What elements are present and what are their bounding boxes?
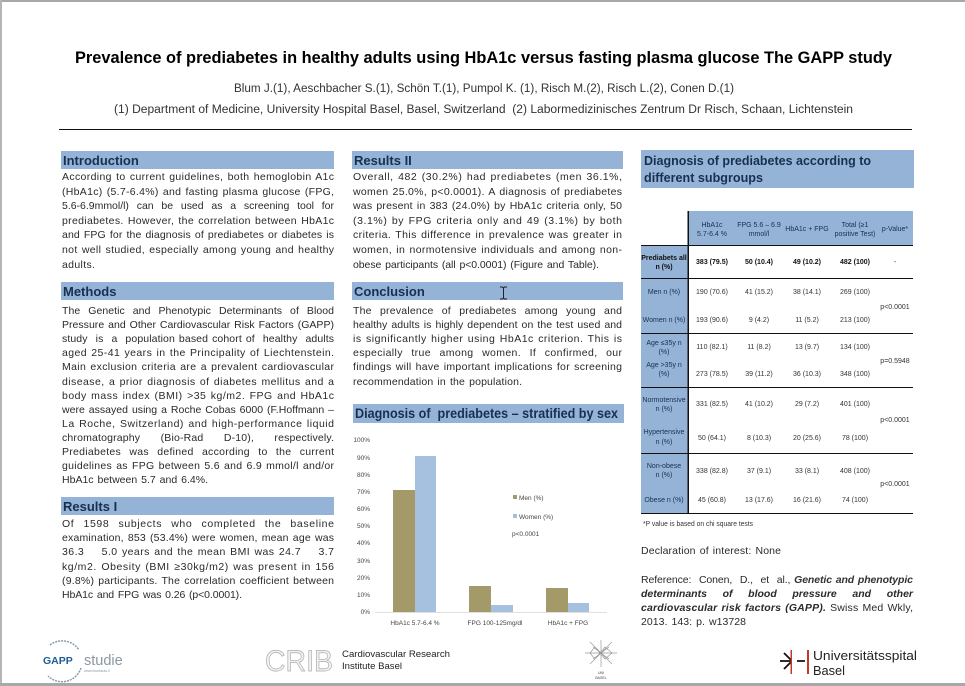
table: prediabetes by subgroup: Hypertensive — [644, 429, 685, 436]
panel: results I: examination, 853 (53.4%) were women, mean age was — [62, 532, 334, 544]
panel: methods: The Genetic and Phenotypic Determinants of Blood — [62, 305, 334, 317]
panel: methods: study is a population based cohort of healthy adults — [62, 333, 334, 345]
panel: subgroup heading: Diagnosis of prediabetes according to — [644, 153, 871, 168]
table: prediabetes by subgroup: 16 (21.6) — [793, 497, 821, 504]
panel: methods: HbA1c between 5.7 and 6.4%. — [62, 474, 208, 486]
panel: introduction: and FPG for the diagnosis of prediabetes or diabetes is — [62, 229, 334, 241]
table: prediabetes by subgroup: positive Test) — [835, 231, 875, 238]
table: prediabetes by subgroup: 78 (100) — [842, 435, 868, 442]
table: prediabetes by subgroup: 213 (100) — [840, 317, 870, 324]
table: prediabetes by subgroup: p<0.0001 — [880, 304, 910, 311]
logo: Universitätsspital Basel: Universitätsspital — [813, 648, 917, 663]
panel: chart: 30% — [357, 558, 370, 565]
table: prediabetes by subgroup: n (%) — [656, 406, 672, 413]
panel: introduction: prediabetes. However, the correlation between HbA1c — [62, 215, 334, 227]
table: prediabetes by subgroup: 50 (64.1) — [698, 435, 726, 442]
table: prediabetes by subgroup: 9 (4.2) — [749, 317, 769, 324]
panel: chart: HbA1c + FPG — [548, 620, 588, 627]
title: Prevalence of prediabetes in healthy adults using HbA1c versus fasting plasma glucose The GAPP study — [75, 48, 893, 67]
table: prediabetes by subgroup: 383 (79.5) — [696, 259, 728, 266]
panel: results II: Results II — [354, 153, 412, 168]
table: prediabetes by subgroup: 11 (5.2) — [795, 317, 819, 324]
panel: introduction: not well studied, especially among young and healthy — [62, 244, 335, 256]
panel: chart: 20% — [357, 575, 370, 582]
logo: CRIB: Cardiovascular Research — [342, 649, 450, 659]
panel: results I: Results I — [63, 499, 117, 514]
authors: Blum J.(1), Aeschbacher S.(1), Schön T.(1), Pumpol K. (1), Risch M.(2), Risch L.(2), Conen D.(1) — [234, 83, 734, 95]
table: prediabetes by subgroup: 33 (8.1) — [795, 468, 819, 475]
table: prediabetes by subgroup: p<0.0001 — [880, 417, 910, 424]
panel: conclusion: recommendation in the population. — [353, 376, 522, 388]
table: prediabetes by subgroup: FPG 5.6 – 6.9 — [737, 222, 781, 229]
panel: methods: aged 25-41 years in the Principality of Liechtenstein. — [62, 347, 334, 359]
table: prediabetes by subgroup: (%) — [659, 349, 669, 356]
reference: determinants of blood pressure and other — [641, 588, 914, 600]
table: prediabetes by subgroup: 8 (10.3) — [747, 435, 771, 442]
panel: conclusion: findings will have important implications for screening — [353, 361, 622, 373]
panel: methods: Pressure and Other Cardiovascular Risk Factors (GAPP) — [62, 319, 334, 331]
table: prediabetes by subgroup: n (%) — [656, 472, 672, 479]
table: prediabetes by subgroup: Men n (%) — [648, 289, 680, 296]
panel: chart: Women (%) — [519, 514, 553, 521]
table: prediabetes by subgroup: p=0.5948 — [880, 358, 910, 365]
table: prediabetes by subgroup: 269 (100) — [840, 289, 870, 296]
panel: introduction: Introduction — [63, 153, 139, 168]
panel: chart: FPG 100-125mg/dl — [468, 620, 523, 627]
table: prediabetes by subgroup: 37 (9.1) — [747, 468, 771, 475]
panel: methods: La Roche, Switzerland) and high-performance liquid — [62, 418, 334, 430]
panel: chart: 80% — [357, 472, 370, 479]
panel: chart: 70% — [357, 489, 370, 496]
panel: methods: guidelines as FPG between 5.6 and 6.9 mmol/l and/or — [62, 460, 334, 472]
panel: results I: HbA1c and FPG was 0.26 (p<0.0001). — [62, 589, 242, 601]
reference: Reference: Conen, D., et al., Genetic and phenotypic — [641, 574, 913, 586]
logo: Universitätsspital Basel — [780, 648, 917, 678]
table footnote: *P value is based on chi square tests — [643, 521, 753, 528]
table: prediabetes by subgroup: 39 (11.2) — [745, 371, 773, 378]
table: prediabetes by subgroup: 190 (70.6) — [696, 289, 728, 296]
panel: chart: HbA1c 5.7-6.4 % — [390, 620, 440, 627]
panel: chart: 100% — [353, 437, 370, 444]
logo: GAPP studie: www.biusbsuis.li — [84, 669, 110, 673]
table: prediabetes by subgroup: Obese n (%) — [644, 497, 684, 504]
table: prediabetes by subgroup: p-Value* — [882, 226, 908, 233]
panel: results II: (3.1%) by FPG criteria only and 49 (3.1%) by both — [353, 215, 622, 227]
table: prediabetes by subgroup: HbA1c + FPG — [785, 226, 829, 233]
table: prediabetes by subgroup: 45 (60.8) — [698, 497, 726, 504]
logo: Uni Basel: BASEL — [595, 676, 607, 680]
panel: results II: Overall, 482 (30.2%) had prediabetes (men 36.1%, — [353, 171, 622, 183]
panel: conclusion: especially true among women. If confirmed, our — [353, 347, 622, 359]
panel: results I: 36.3 5.0 years and the mean BMI was 24.7 3.7 — [62, 546, 334, 558]
table: prediabetes by subgroup: 348 (100) — [840, 371, 870, 378]
panel: introduction: adults. — [62, 259, 95, 271]
panel: results I: Of 1598 subjects who completed the baseline — [62, 518, 334, 530]
table: prediabetes by subgroup: 193 (90.6) — [696, 317, 728, 324]
panel: chart: 40% — [357, 540, 370, 547]
panel: conclusion: Conclusion — [354, 284, 425, 299]
logo: CRIB — [265, 645, 450, 678]
table: prediabetes by subgroup: 482 (100) — [840, 259, 870, 266]
panel: introduction — [61, 151, 335, 271]
table: prediabetes by subgroup: 13 (9.7) — [795, 344, 819, 351]
panel: chart — [353, 404, 624, 627]
table: prediabetes by subgroup: 74 (100) — [842, 497, 868, 504]
logo: CRIB: CRIB — [265, 645, 333, 678]
table: prediabetes by subgroup: 13 (17.6) — [745, 497, 773, 504]
logo: Uni Basel: UNI — [598, 671, 604, 675]
panel: introduction: 5.6-6.9mmol/l) can be used as a screening tool for — [62, 200, 334, 212]
reference: 2013. 143: p. w13728 — [641, 616, 746, 628]
table: prediabetes by subgroup: HbA1c — [701, 222, 723, 229]
table: prediabetes by subgroup: p<0.0001 — [880, 481, 910, 488]
panel: chart: 0% — [361, 609, 370, 616]
logo: GAPP studie: studie — [84, 653, 123, 669]
panel: results I: kg/m2. Obesity (BMI ≥30kg/m2) was present in 156 — [62, 561, 334, 573]
logo: GAPP studie: GAPP — [43, 655, 73, 667]
panel: results II: obese participants (all p<0.0001) (Figure and Table). — [353, 259, 599, 271]
table: prediabetes by subgroup: 36 (10.3) — [793, 371, 821, 378]
panel: chart: 10% — [357, 592, 370, 599]
panel: results I — [61, 497, 334, 601]
panel: conclusion: is significantly higher using HbA1c criterion. This is — [353, 333, 622, 345]
table: prediabetes by subgroup: 110 (82.1) — [696, 344, 728, 351]
table: prediabetes by subgroup: Prediabets all — [641, 255, 687, 262]
table: prediabetes by subgroup: mmol/l — [749, 231, 770, 238]
panel: conclusion — [352, 282, 623, 388]
logo: CRIB: Institute Basel — [342, 661, 402, 671]
panel: methods: Main exclusion criteria are a prevalent cardiovascular — [62, 361, 334, 373]
table: prediabetes by subgroup: - — [894, 259, 897, 266]
table: prediabetes by subgroup: 49 (10.2) — [793, 259, 821, 266]
table: prediabetes by subgroup — [641, 211, 913, 514]
table: prediabetes by subgroup: 273 (78.5) — [696, 371, 728, 378]
panel: methods: Methods — [63, 284, 116, 299]
table: prediabetes by subgroup: Age ≤35y n — [646, 340, 682, 347]
table: prediabetes by subgroup: Normotensive — [642, 397, 686, 404]
panel: introduction: (HbA1c) (5.7-6.4%) and fasting plasma glucose (FPG, — [62, 186, 334, 198]
table: prediabetes by subgroup: Total (≥1 — [842, 222, 869, 229]
panel: methods: were assayed using a Roche Cobas 6000 (F.Hoffmann – — [61, 404, 334, 416]
panel: methods: Prediabetes was defined according to the current — [62, 446, 334, 458]
panel: chart: Diagnosis of prediabetes – stratified by sex — [355, 405, 618, 421]
panel: subgroup heading: different subgroups — [644, 170, 763, 185]
panel: methods: disease, a prior diagnosis of diabetes mellitus and a — [62, 376, 334, 388]
panel: introduction: According to current guidelines, both hemoglobin A1c — [62, 171, 334, 183]
affiliations: (1) Department of Medicine, University Hospital Basel, Basel, Switzerland (2) Labormedizinisches Zentrum Dr Risch, Schaan, Lichtenstein — [114, 104, 853, 116]
table: prediabetes by subgroup: (%) — [659, 371, 669, 378]
panel: results II: was present in 383 (24.0%) by HbA1c criteria only, 50 — [352, 200, 622, 212]
table: prediabetes by subgroup: Non-obese — [647, 463, 681, 470]
declaration of interest: Declaration of interest: None — [641, 545, 781, 557]
table: prediabetes by subgroup: 331 (82.5) — [696, 401, 728, 408]
table: prediabetes by subgroup: n (%) — [656, 439, 672, 446]
table: prediabetes by subgroup: 41 (10.2) — [745, 401, 773, 408]
table: prediabetes by subgroup: 29 (7.2) — [795, 401, 819, 408]
table: prediabetes by subgroup: n (%) — [655, 264, 673, 271]
panel: methods: body mass index (BMI) >35 kg/m2. FPG and HbA1c — [62, 390, 334, 402]
panel: results II: criteria. This difference in prevalence was greater in — [353, 229, 622, 241]
table: prediabetes by subgroup: 408 (100) — [840, 468, 870, 475]
table: prediabetes by subgroup: Women n (%) — [643, 317, 685, 324]
logo: GAPP studie — [43, 641, 123, 682]
logo: Universitätsspital Basel: Basel — [813, 663, 845, 678]
reference — [641, 574, 914, 628]
logo: Uni Basel — [585, 640, 617, 680]
table: prediabetes by subgroup: 401 (100) — [840, 401, 870, 408]
panel: chart: 50% — [357, 523, 370, 530]
table: prediabetes by subgroup: 11 (8.2) — [747, 344, 771, 351]
table: prediabetes by subgroup: 134 (100) — [840, 344, 870, 351]
panel: results I: (9.8%) participants. The correlation coefficient between — [62, 575, 334, 587]
panel: conclusion: The prevalence of prediabetes among young and — [353, 305, 622, 317]
panel: chart: 90% — [357, 455, 370, 462]
panel: chart: 60% — [357, 506, 370, 513]
table: prediabetes by subgroup: 38 (14.1) — [793, 289, 821, 296]
panel: chart: p<0.0001 — [512, 531, 540, 538]
panel: methods — [61, 282, 334, 486]
table: prediabetes by subgroup: 338 (82.8) — [696, 468, 728, 475]
panel: methods: chromatography (Bio-Rad D-10), respectively. — [62, 432, 334, 444]
panel: results II: women, in normotensive individuals and among non- — [352, 244, 622, 256]
panel: results II — [352, 151, 623, 271]
table: prediabetes by subgroup: Age >35y n — [646, 362, 682, 369]
reference: cardiovascular risk factors (GAPP). Swiss Med Wkly, — [641, 602, 913, 614]
panel: chart: Men (%) — [519, 495, 544, 502]
icon: text cursor — [500, 287, 507, 299]
panel: conclusion: healthy adults is highly dependent on the test used and — [353, 319, 622, 331]
panel: results II: women 25.0%, p<0.0001). A diagnosis of prediabetes — [352, 186, 622, 198]
table: prediabetes by subgroup: 20 (25.6) — [793, 435, 821, 442]
table: prediabetes by subgroup: 50 (10.4) — [745, 259, 773, 266]
panel: subgroup heading — [641, 150, 914, 188]
table: prediabetes by subgroup: 5.7-6.4 % — [697, 231, 727, 238]
table: prediabetes by subgroup: 41 (15.2) — [745, 289, 773, 296]
